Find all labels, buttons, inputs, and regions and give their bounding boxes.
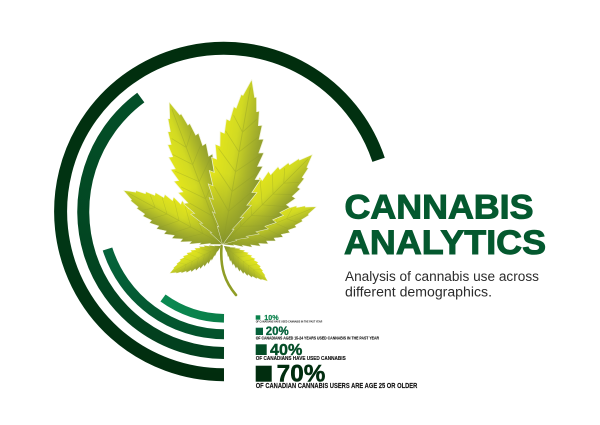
leaflet: far left [114, 174, 232, 261]
stat caption 10%: OF CANADIANS HAVE USED CANNABIS IN THE PAST YEAR [256, 320, 322, 324]
stat square 40% [256, 344, 267, 355]
leaflet: top centre [197, 75, 277, 249]
stat: 70% [256, 361, 417, 390]
stat value 10%: 10% [264, 313, 279, 322]
ring: 70% outer arc [61, 48, 379, 375]
leaflet: upper left [147, 94, 245, 253]
title: CANNABIS [344, 188, 534, 226]
leaflet: bottom right [218, 238, 274, 289]
stat square 10% [256, 315, 260, 320]
stat caption 20%: OF CANADIANS AGED 15-24 YEARS USED CANNABIS IN THE PAST YEAR [256, 335, 380, 340]
title [344, 188, 546, 262]
leaflet: bottom left [165, 237, 226, 283]
stat: 10% [256, 313, 322, 324]
subtitle text [345, 269, 539, 300]
icon: cannabis leaf [114, 75, 328, 295]
ring: 10% arc [163, 298, 224, 318]
stat value 70%: 70% [277, 361, 325, 388]
stat value 20%: 20% [266, 326, 289, 338]
stat value 40%: 40% [270, 342, 302, 359]
subtitle text: different demographics. [345, 285, 492, 300]
title: ANALYTICS [344, 224, 546, 262]
ring: 20% arc [108, 249, 224, 334]
leaflet: upper right [207, 139, 328, 260]
stat square 20% [256, 328, 263, 335]
stat caption 40%: OF CANADIANS HAVE USED CANNABIS [256, 356, 346, 362]
stat caption 70%: OF CANADIAN CANNABIS USERS ARE AGE 25 OR OLDER [256, 383, 417, 390]
ring: 40% arc [83, 98, 224, 353]
leaflet: lower right [217, 191, 323, 260]
subtitle text: Analysis of cannabis use across [345, 269, 539, 284]
stat: 40% [256, 342, 346, 362]
stat square 70% [256, 366, 272, 382]
stat: 20% [256, 326, 380, 340]
leaf stem [221, 246, 236, 295]
